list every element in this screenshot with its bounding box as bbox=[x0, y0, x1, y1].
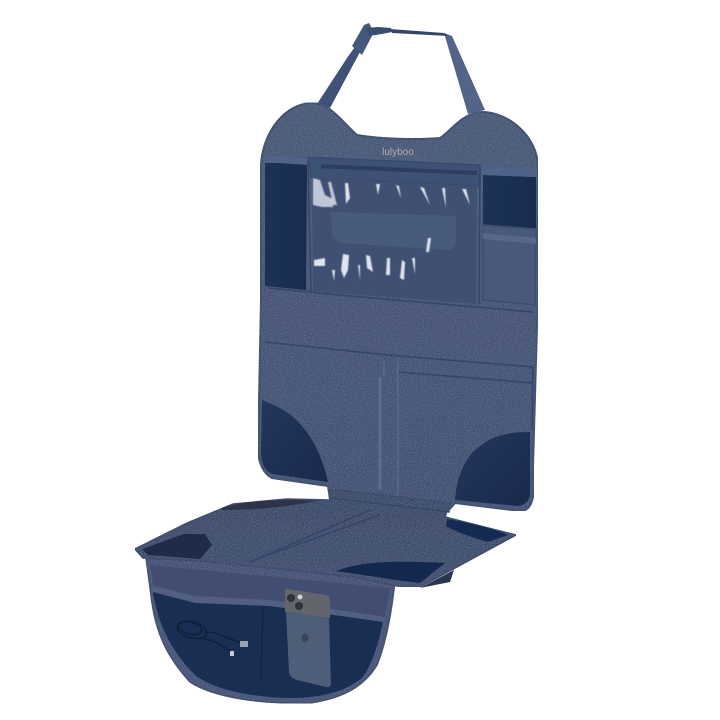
zipper line bbox=[316, 164, 477, 175]
seat left rear leather bbox=[222, 500, 318, 510]
mesh pocket bbox=[153, 592, 383, 698]
icon: smartphone in pocket bbox=[285, 589, 331, 687]
zipper pocket band bbox=[308, 157, 480, 186]
zipper pull bbox=[313, 162, 321, 177]
seat front left leather bbox=[142, 534, 212, 559]
brand logo: lulyboo bbox=[382, 147, 414, 158]
rear support behind seat bbox=[420, 570, 454, 588]
front pocket flap bbox=[145, 550, 396, 703]
right pocket hem bbox=[483, 166, 536, 177]
pocket upper tint bbox=[150, 565, 390, 618]
back panel bbox=[258, 103, 538, 511]
seat stitching detail bbox=[250, 510, 380, 562]
mesh divider bbox=[261, 606, 263, 680]
seat fabric bbox=[135, 489, 516, 587]
phone camera bbox=[287, 594, 295, 602]
left leather corner bbox=[261, 400, 328, 482]
phone top bbox=[285, 589, 330, 618]
head strap bbox=[317, 23, 485, 114]
clear vinyl window bbox=[312, 178, 477, 304]
seat rear right leather bbox=[446, 519, 508, 542]
right lower pocket hem bbox=[483, 233, 536, 244]
seat panel bbox=[135, 489, 516, 587]
pocket fabric bbox=[145, 550, 396, 703]
right lower pocket bbox=[483, 225, 536, 305]
vinyl inner pocket bbox=[331, 212, 456, 250]
phone logo bbox=[302, 634, 308, 642]
mesh hem bbox=[153, 586, 386, 622]
phone behind mesh bbox=[286, 611, 331, 687]
seat fold line bbox=[330, 498, 450, 512]
icon: coiled cable bbox=[175, 618, 248, 656]
back panel fabric bbox=[258, 103, 538, 511]
center pocket stitching bbox=[380, 357, 398, 497]
right leather corner bbox=[455, 432, 530, 506]
stitched seams bbox=[265, 161, 533, 430]
seat front right leather bbox=[336, 562, 445, 583]
vinyl reflections bbox=[313, 178, 470, 281]
right mesh pocket bbox=[483, 175, 536, 229]
left mesh pocket bbox=[265, 163, 307, 290]
left pocket hem bbox=[264, 155, 308, 165]
